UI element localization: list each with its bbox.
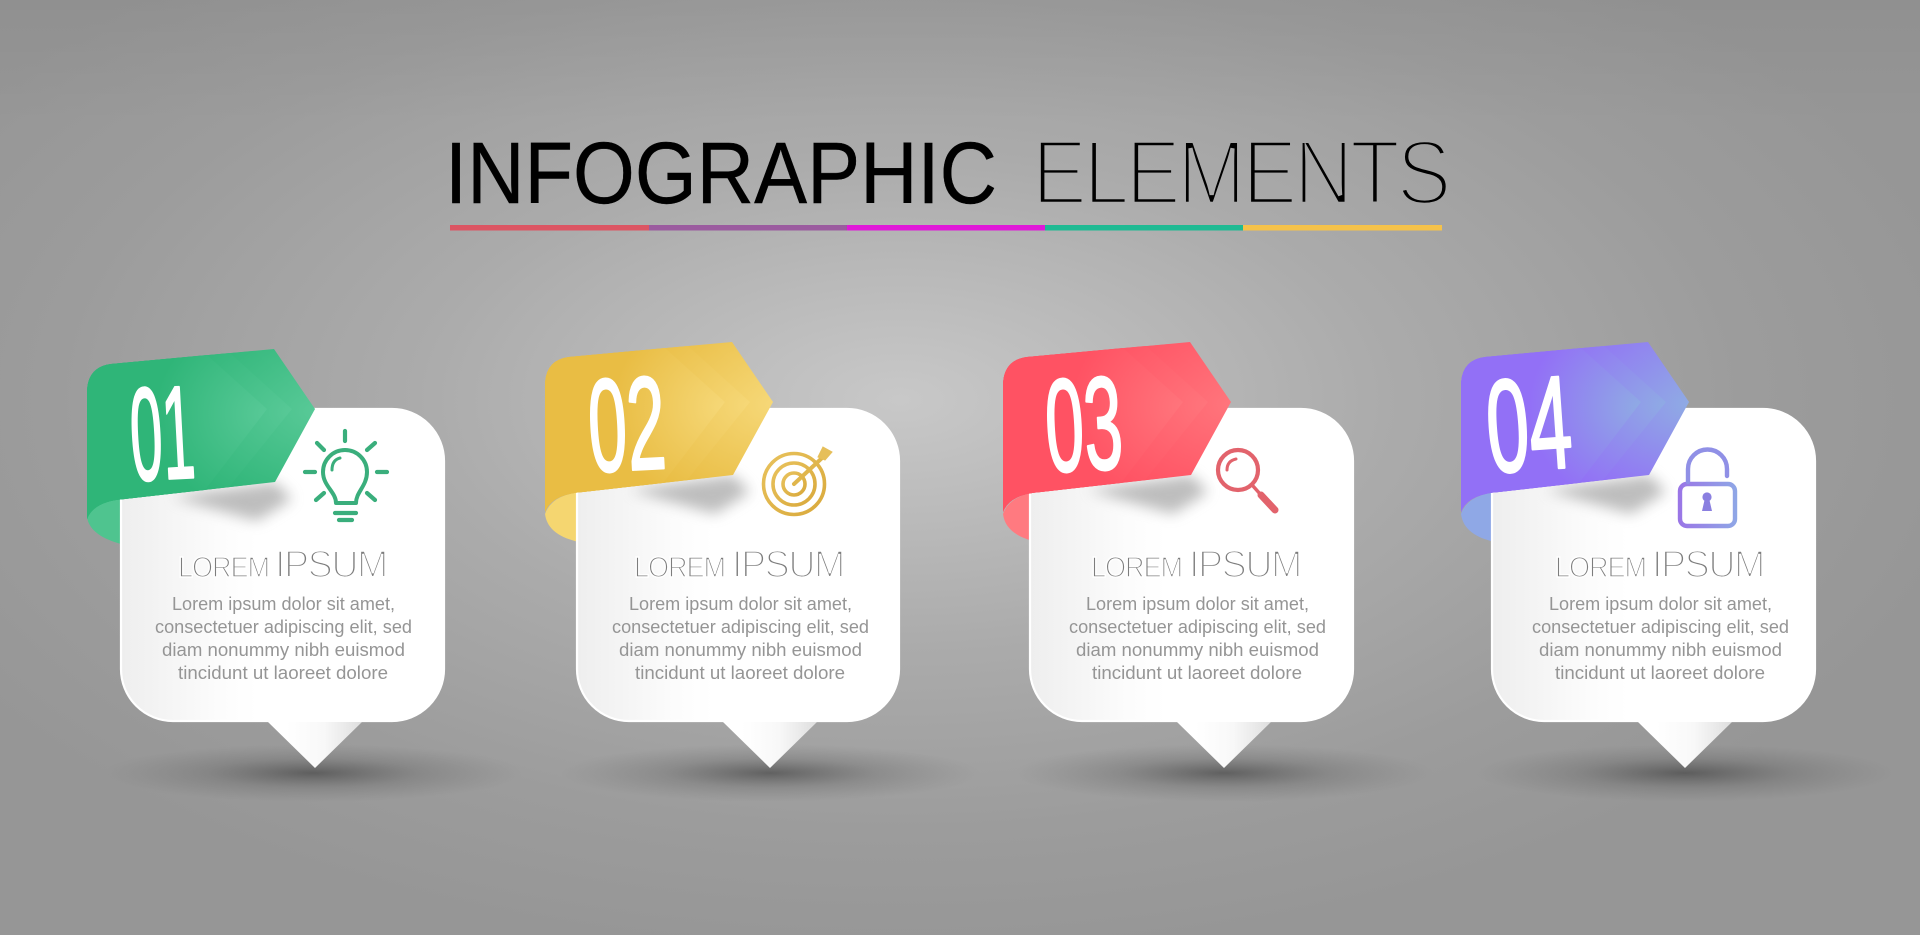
body text 02: diam nonummy nibh euismod	[619, 640, 862, 660]
body text 03: tincidunt ut laoreet dolore	[1092, 663, 1302, 683]
panel: step 01	[87, 349, 523, 802]
icon: target	[764, 447, 832, 514]
body text 01: Lorem ipsum dolor sit amet,	[172, 594, 395, 614]
flag 03	[1003, 342, 1231, 512]
body text 04: diam nonummy nibh euismod	[1539, 640, 1782, 660]
ground shadow 01	[103, 744, 523, 802]
flag 01	[87, 349, 315, 519]
flag 02	[545, 342, 773, 512]
heading 03: IPSUM	[1189, 544, 1301, 586]
card 03	[1030, 409, 1353, 768]
ribbon curl 03	[1003, 490, 1053, 542]
ground shadow 04	[1475, 744, 1895, 802]
heading 01: IPSUM	[275, 544, 387, 586]
title word: INFOGRAPHIC: INFOGRAPHIC	[445, 125, 997, 222]
body text 04: consectetuer adipiscing elit, sed	[1532, 617, 1789, 637]
body text 04: tincidunt ut laoreet dolore	[1555, 663, 1765, 683]
heading 02: IPSUM	[732, 544, 844, 586]
heading 04: IPSUM	[1652, 544, 1764, 586]
panel: step 01: 01	[126, 358, 198, 508]
heading 03: LOREM	[1091, 552, 1182, 584]
body text 01: tincidunt ut laoreet dolore	[178, 663, 388, 683]
heading 04: LOREM	[1555, 552, 1646, 584]
number 03: 03	[1041, 349, 1126, 500]
body text 03: diam nonummy nibh euismod	[1076, 640, 1319, 660]
body text 04: Lorem ipsum dolor sit amet,	[1549, 594, 1772, 614]
body text 03: Lorem ipsum dolor sit amet,	[1086, 594, 1309, 614]
ribbon curl 04	[1461, 490, 1511, 542]
icon: light bulb	[305, 431, 387, 520]
body text 01: consectetuer adipiscing elit, sed	[155, 617, 412, 637]
heading 04	[1555, 544, 1764, 586]
body text 01: diam nonummy nibh euismod	[162, 640, 405, 660]
body text 03	[1069, 594, 1326, 683]
body text 03: consectetuer adipiscing elit, sed	[1069, 617, 1326, 637]
body text 01	[155, 594, 412, 683]
icon: padlock	[1680, 450, 1735, 526]
flag shadow 01	[172, 482, 292, 521]
heading 01: LOREM	[178, 552, 269, 584]
ground shadow 02	[560, 744, 980, 802]
card 02	[577, 409, 899, 768]
card 01	[121, 409, 444, 768]
heading 03	[1091, 544, 1301, 586]
card 04	[1492, 409, 1815, 768]
heading 02	[634, 544, 844, 586]
body text 02: consectetuer adipiscing elit, sed	[612, 617, 869, 637]
flag 04	[1461, 342, 1689, 512]
flag shadow 03	[1088, 475, 1208, 514]
heading 01	[178, 544, 387, 586]
body text 02: Lorem ipsum dolor sit amet,	[629, 594, 852, 614]
body text 04	[1532, 594, 1789, 683]
ground shadow 03	[1014, 744, 1434, 802]
flag shadow 04	[1546, 475, 1666, 514]
body text 02	[612, 594, 869, 683]
body text 02: tincidunt ut laoreet dolore	[635, 663, 845, 683]
panel: step 02	[545, 342, 980, 802]
icon: magnifying glass	[1218, 450, 1275, 510]
ribbon curl 01	[87, 497, 137, 544]
ribbon curl 02	[545, 490, 595, 542]
number 04: 04	[1481, 348, 1576, 501]
title word: ELEMENTS: ELEMENTS	[1032, 122, 1449, 224]
flag shadow 02	[630, 475, 750, 514]
number 02: 02	[584, 349, 669, 500]
title	[445, 122, 1449, 224]
panel: step 04	[1461, 342, 1895, 802]
heading 02: LOREM	[634, 552, 725, 584]
title underline	[450, 225, 1442, 230]
panel: step 03	[1003, 342, 1434, 802]
